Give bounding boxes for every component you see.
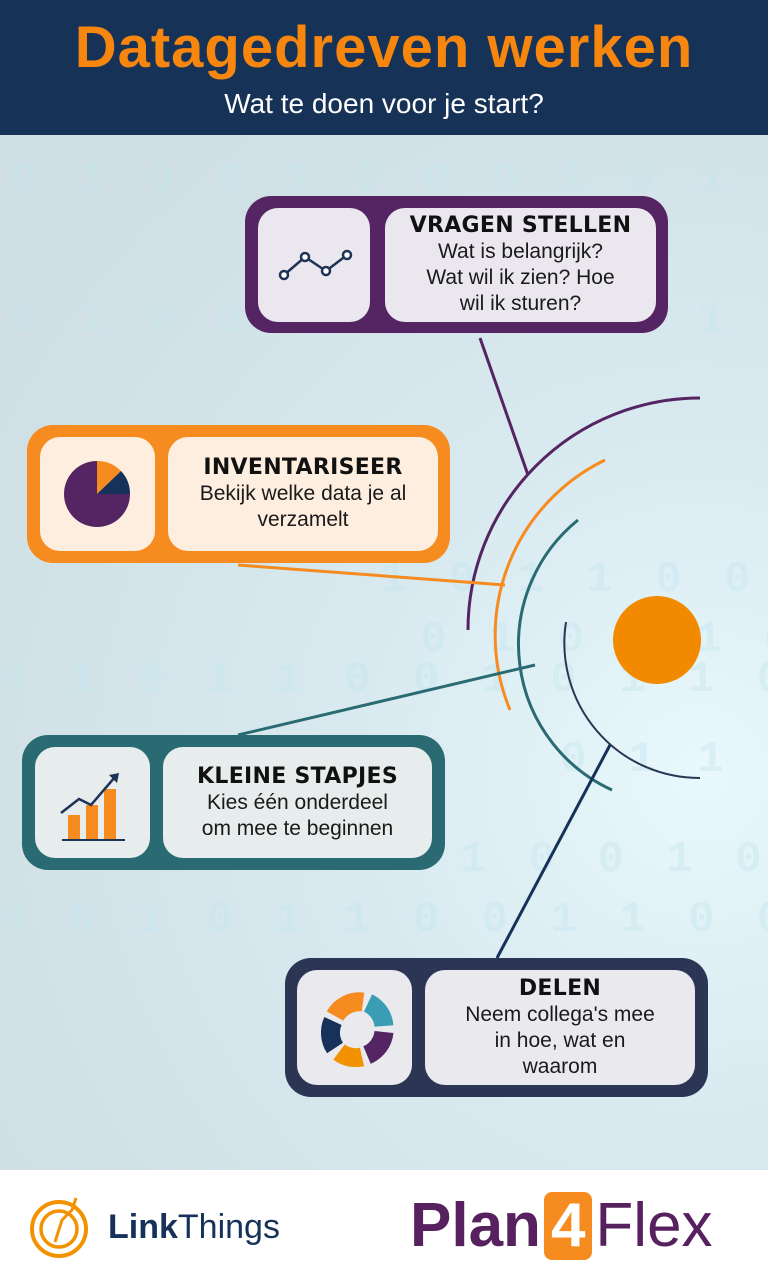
text: waarom xyxy=(523,1054,597,1078)
text: in hoe, wat en xyxy=(495,1028,625,1052)
icon: line chart xyxy=(258,208,370,322)
center circle xyxy=(613,596,701,684)
text: Neem collega's mee xyxy=(465,1002,655,1026)
logo: LinkThings: LinkThings xyxy=(108,1208,280,1246)
logo: Plan4Flex: 4 xyxy=(551,1191,585,1260)
panel: delen xyxy=(285,958,708,1097)
text xyxy=(168,437,438,551)
logo: LinkThings xyxy=(30,1198,280,1258)
icon: bar chart growth xyxy=(35,747,150,858)
panel: vragen stellen xyxy=(245,196,668,333)
icon: cycle xyxy=(297,970,412,1085)
text: om mee te beginnen xyxy=(202,816,393,840)
panel: inventariseer xyxy=(27,425,450,563)
text: Wat is belangrijk? xyxy=(438,240,603,263)
text: KLEINE STAPJES xyxy=(197,764,398,788)
text: Wat wil ik zien? Hoe xyxy=(426,266,615,289)
text xyxy=(425,970,695,1085)
header xyxy=(0,0,768,135)
text: verzamelt xyxy=(257,508,349,531)
panel: kleine stapjes xyxy=(22,735,445,870)
logo: Plan4Flex: Plan Flex xyxy=(410,1191,713,1260)
title: Datagedreven werken xyxy=(75,15,693,80)
text: VRAGEN STELLEN xyxy=(410,213,631,238)
subtitle: Wat te doen voor je start? xyxy=(224,88,544,119)
text: DELEN xyxy=(519,976,601,1000)
icon: pie chart xyxy=(40,437,155,551)
text: INVENTARISEER xyxy=(203,455,403,480)
text xyxy=(163,747,432,858)
text: Bekijk welke data je al xyxy=(200,482,406,505)
footer xyxy=(0,1170,768,1280)
text: Kies één onderdeel xyxy=(207,790,388,814)
text: wil ik sturen? xyxy=(460,292,581,315)
text xyxy=(385,208,656,322)
